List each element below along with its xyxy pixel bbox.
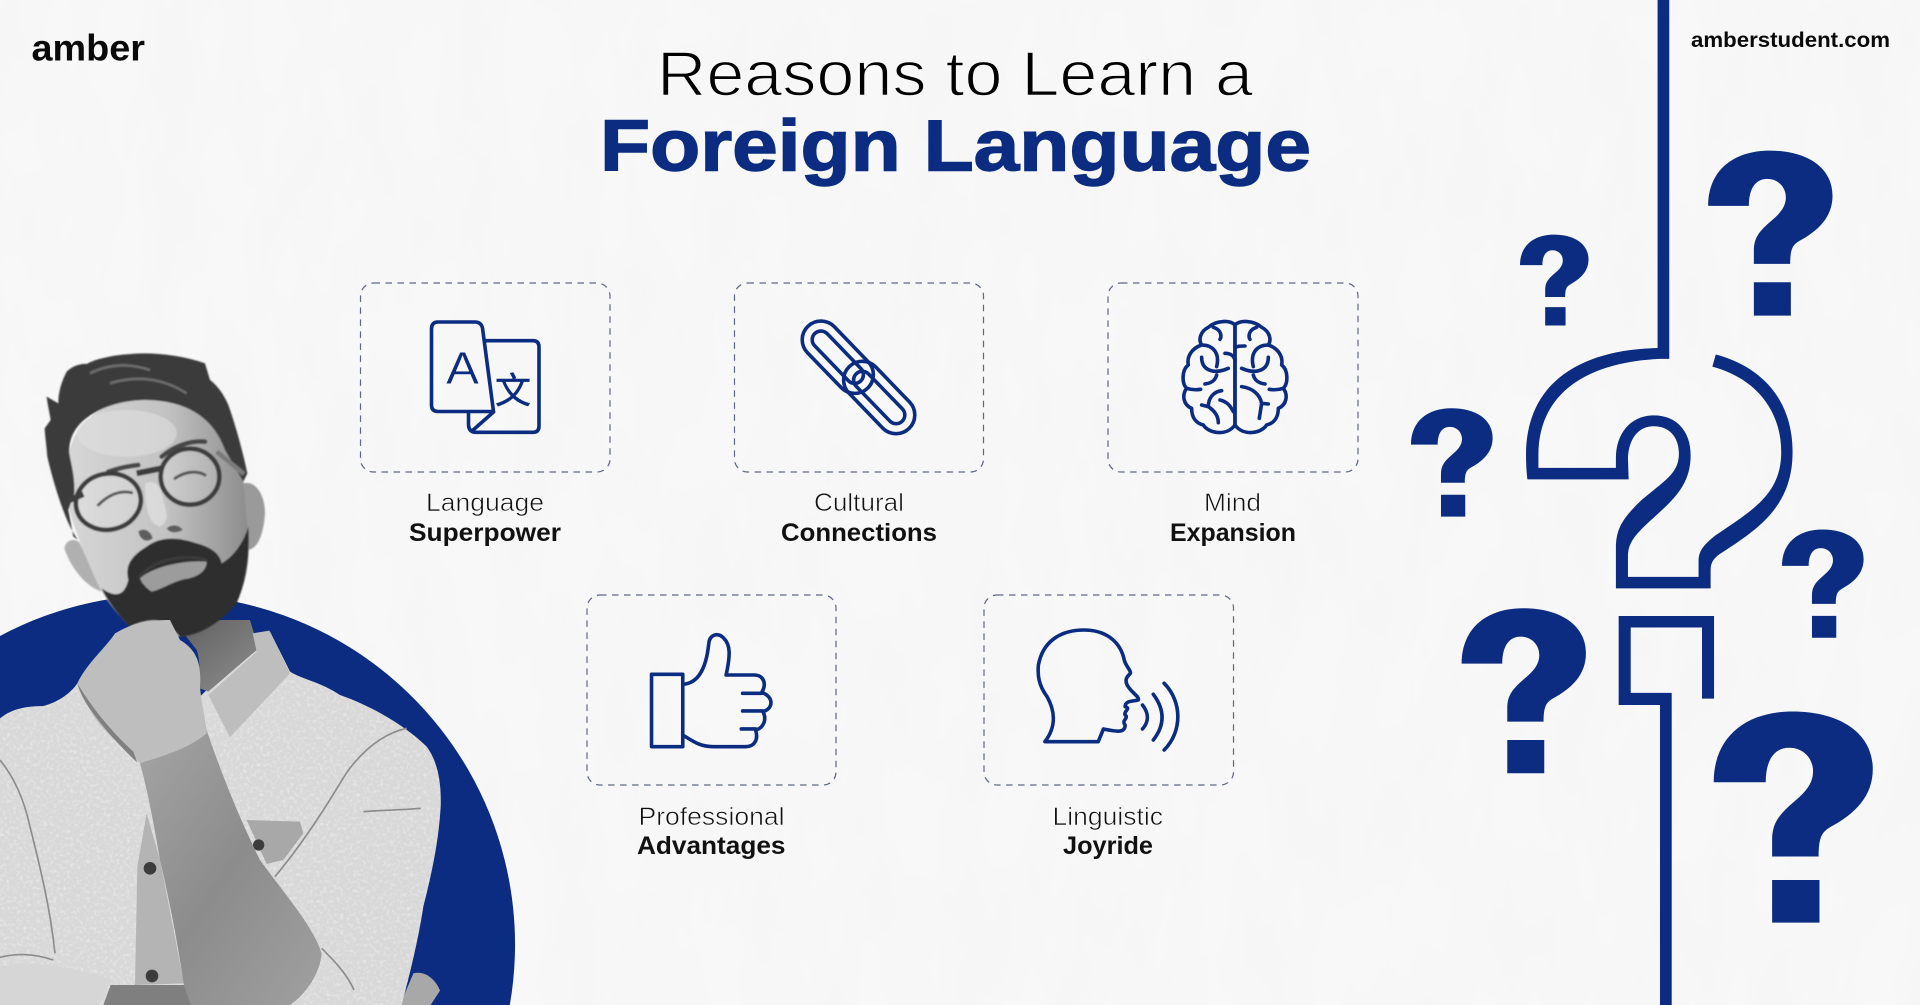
label: Superpower bbox=[409, 519, 561, 547]
label bbox=[409, 489, 561, 547]
icon: speaking head bbox=[1038, 630, 1178, 750]
logo: amber: amber bbox=[32, 28, 145, 69]
label bbox=[637, 803, 786, 860]
label: Expansion bbox=[1170, 519, 1296, 547]
icon: chain links bbox=[794, 313, 923, 441]
icon: question mark lower left bbox=[1462, 608, 1586, 773]
icon: question mark top right bbox=[1708, 151, 1833, 316]
large outlined question mark with vertical line bbox=[1526, 0, 1793, 1005]
panel: Mind Expansion bbox=[1108, 283, 1358, 547]
collar bbox=[208, 631, 290, 737]
label: Professional bbox=[638, 803, 784, 831]
label bbox=[781, 489, 937, 547]
thinking man illustration bbox=[0, 353, 441, 1005]
torso bbox=[0, 620, 441, 1005]
label: Connections bbox=[781, 519, 937, 547]
label: Advantages bbox=[637, 832, 786, 860]
left ear bbox=[64, 540, 102, 592]
icon: question mark right bbox=[1782, 530, 1864, 638]
icon: brain bbox=[1183, 321, 1287, 433]
lower part bbox=[1619, 616, 1714, 1005]
right hand at bottom bbox=[400, 973, 440, 1005]
icon: translate pages bbox=[432, 322, 539, 432]
fist shading bbox=[77, 683, 137, 763]
upper part bbox=[1526, 0, 1793, 588]
hair highlights bbox=[90, 365, 187, 393]
lip line bbox=[138, 558, 207, 577]
head bbox=[45, 353, 265, 637]
blue circle behind man bbox=[0, 595, 515, 1005]
fist bbox=[77, 620, 207, 763]
icon: question mark left bbox=[1411, 408, 1493, 517]
nose highlight and shadows bbox=[145, 482, 167, 527]
website url: amberstudent.com bbox=[1691, 28, 1890, 52]
label: Cultural bbox=[814, 489, 904, 517]
label: Mind bbox=[1204, 489, 1261, 517]
forearm bbox=[140, 730, 322, 1005]
panel: Cultural Connections bbox=[734, 283, 984, 547]
lips and chin bbox=[140, 561, 207, 592]
face bbox=[68, 399, 249, 637]
title bbox=[600, 40, 1311, 186]
forearm and fist bbox=[0, 620, 322, 1005]
panel: Linguistic Joyride bbox=[984, 595, 1234, 860]
right ear bbox=[243, 483, 265, 550]
hair bbox=[45, 353, 247, 540]
title: Foreign Language bbox=[600, 106, 1311, 186]
glasses bbox=[68, 449, 244, 536]
label: Language bbox=[426, 489, 544, 517]
neck bbox=[173, 620, 257, 692]
label: Linguistic bbox=[1052, 803, 1163, 831]
placket bbox=[135, 813, 184, 985]
eyes bbox=[98, 472, 205, 505]
title: Reasons to Learn a bbox=[657, 40, 1254, 110]
eyebrows bbox=[108, 441, 205, 472]
panel: Professional Advantages bbox=[587, 595, 836, 860]
label: Joyride bbox=[1063, 832, 1153, 860]
pocket patch bbox=[247, 820, 303, 864]
label bbox=[1052, 803, 1163, 860]
forehead highlight bbox=[77, 410, 177, 457]
lower forearm bbox=[103, 985, 191, 1005]
icon: translate pages: 文 bbox=[495, 370, 531, 411]
label bbox=[1170, 489, 1296, 547]
beard bbox=[102, 527, 249, 637]
icon: thumbs up bbox=[652, 635, 771, 747]
panel: Language Superpower bbox=[360, 283, 610, 547]
lower cuff bbox=[0, 963, 111, 1005]
shirt folds bbox=[0, 728, 421, 990]
icon: translate pages: A bbox=[446, 342, 479, 394]
icon: question mark bottom right bbox=[1714, 712, 1873, 923]
shirt bbox=[0, 632, 441, 1005]
scattered question marks bbox=[1411, 151, 1873, 923]
buttons bbox=[144, 839, 264, 982]
icon: question mark small upper left bbox=[1520, 235, 1589, 326]
